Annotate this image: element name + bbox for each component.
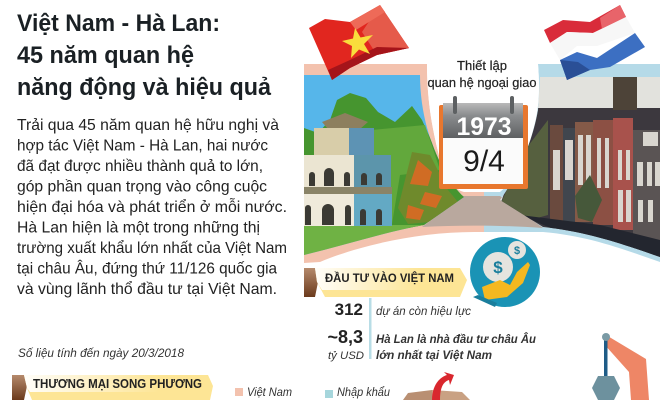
street tree: [575, 175, 602, 222]
stat: investment capital: ~8,3: [327, 327, 363, 347]
tower band: [304, 187, 392, 194]
stat: projects: dự án còn hiệu lực: [376, 304, 471, 318]
intro text block: trường xuất khẩu lớn nhất của Việt Nam: [17, 239, 287, 257]
tower roof: [322, 113, 368, 129]
blue frame, right: [484, 64, 660, 262]
icon: money in hand: [470, 237, 540, 307]
icon: crane arm: [592, 333, 649, 400]
flag star: [342, 28, 373, 58]
investment banner: [304, 268, 467, 297]
heading: diplomatic relations: Thiết lập: [457, 59, 507, 73]
photo: Hanoi turtle tower: [304, 75, 464, 255]
stat: investment capital: tỷ USD: [328, 350, 364, 362]
intro text block: và vùng lãnh thổ đầu tư tại Việt Nam.: [17, 280, 277, 298]
tower arches: [305, 168, 382, 225]
stat divider: [369, 298, 372, 359]
tower middle tier: [304, 155, 354, 187]
title: 45 năm quan hệ: [17, 42, 194, 69]
grass: [304, 225, 424, 255]
data date note: Số liệu tính đến ngày 20/3/2018: [18, 346, 184, 360]
panel: central white arch: [427, 64, 539, 190]
canal bank: [524, 216, 660, 257]
investment heading: ĐẦU TƯ VÀO VIỆT NAM: [325, 270, 454, 285]
tower lower tier: [304, 194, 354, 226]
heading: diplomatic relations: [428, 59, 537, 90]
white swoop under the photos: [320, 234, 660, 272]
stat: investment capital: Hà Lan là nhà đầu tư châu Âu: [376, 331, 537, 346]
salmon frame, left: [304, 64, 484, 263]
flame tree: [398, 152, 458, 224]
icon: Netherlands flag: [544, 5, 645, 80]
heading: diplomatic relations: quan hệ ngoại giao: [428, 76, 537, 90]
icon: box with red arrow: [403, 372, 470, 400]
icon: money in hand: $: [493, 258, 503, 277]
icon: Vietnam flag: [309, 5, 409, 80]
title: Việt Nam - Hà Lan:: [17, 10, 220, 37]
photo: Amsterdam canal houses: [500, 74, 660, 265]
road between photos: [422, 196, 543, 228]
stat: projects: [335, 300, 471, 319]
houses: [550, 125, 563, 225]
intro text block: góp phần quan trọng vào công cuộc: [17, 178, 267, 196]
intro text block: hiện đại hóa và phát triển ở mỗi nước.: [17, 197, 287, 216]
intro text block: Hà Lan hiện là một trong những thị: [17, 220, 260, 236]
legend: Vietnam: Việt Nam: [247, 387, 292, 399]
intro text block: Trải qua 45 năm quan hệ hữu nghị và: [17, 117, 279, 134]
stat: investment capital: lớn nhất tại Việt Nam: [376, 348, 492, 362]
intro text block: [17, 117, 287, 298]
title: năng động và hiệu quả: [17, 74, 271, 101]
intro text block: hợp tác Việt Nam - Hà Lan, hai nước: [17, 138, 268, 154]
trade heading: THƯƠNG MẠI SONG PHƯƠNG: [33, 377, 202, 391]
roofs: [500, 108, 660, 260]
icon: money in hand: $: [514, 245, 520, 257]
background trees: [304, 93, 470, 228]
stat: investment capital: [327, 327, 537, 362]
legend: imports: Nhập khẩu: [337, 387, 391, 399]
church tower: [613, 74, 637, 110]
left trees: [500, 120, 548, 220]
calendar date: 9/4: [463, 145, 505, 178]
intro text block: đã đạt được nhiều thành quả to lớn,: [17, 158, 263, 175]
intro text block: tại châu Âu, đứng thứ 11/126 quốc gia: [17, 258, 277, 278]
panel: photo backdrop: [304, 64, 660, 272]
icon: calendar: [439, 96, 528, 189]
calendar year: 1973: [456, 113, 512, 141]
title: [17, 10, 271, 101]
tower top tier: [314, 128, 349, 158]
stat: projects: 312: [335, 300, 363, 319]
trade banner: [12, 375, 213, 400]
windows: [553, 132, 660, 222]
